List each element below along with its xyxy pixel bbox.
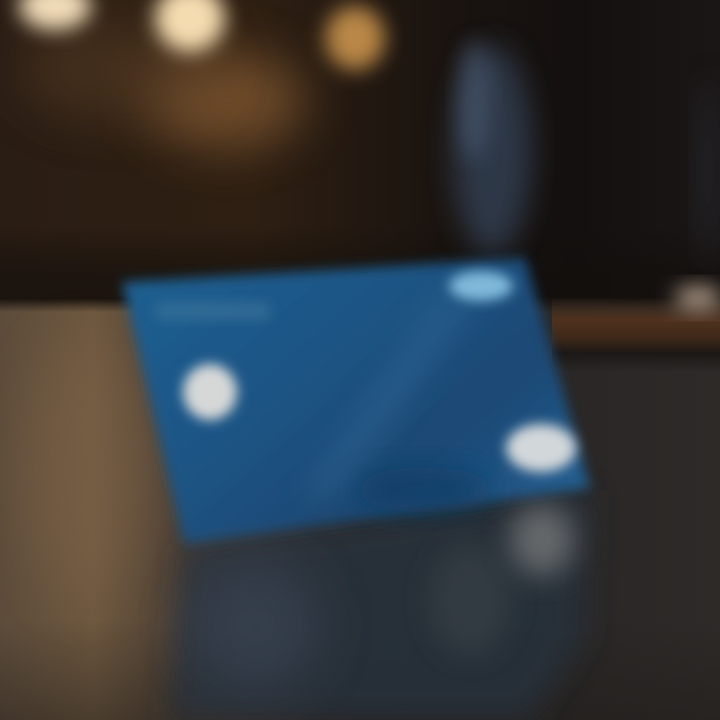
card body	[122, 258, 590, 544]
card badge top right	[449, 271, 513, 301]
card logo text blur	[155, 302, 270, 320]
card reflection	[170, 490, 590, 720]
card chip	[183, 364, 237, 420]
background wall	[0, 0, 720, 310]
card emblem bottom right	[506, 424, 576, 472]
card diagonal sheen	[300, 290, 480, 500]
right shelf edge	[552, 285, 720, 372]
credit card	[122, 258, 590, 544]
bokeh lights	[19, 0, 385, 70]
table surface	[0, 298, 720, 720]
blue-grey vertical blur	[452, 40, 718, 265]
card dark area	[355, 468, 495, 512]
warm glow on wall	[20, 20, 305, 148]
